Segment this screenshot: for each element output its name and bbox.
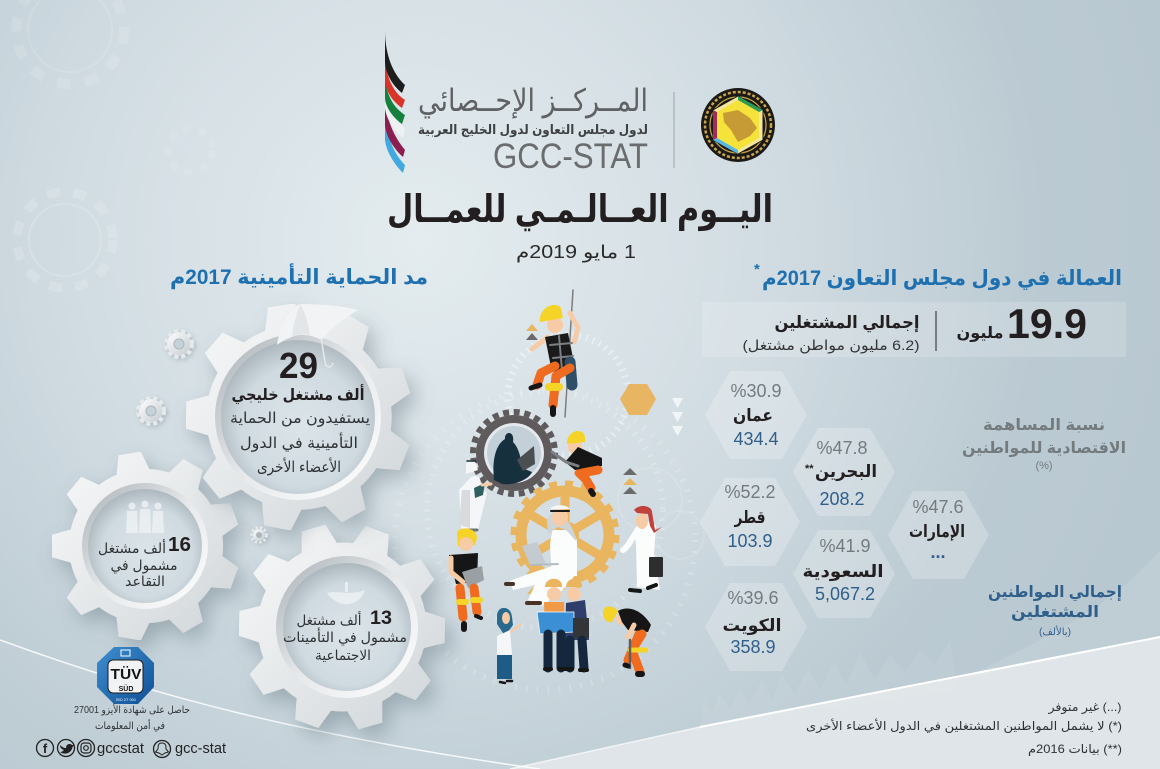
icon: umbrella [277, 304, 358, 367]
logo: Arabic subtitle: لدول مجلس التعاون لدول الخليج العربية [418, 122, 648, 137]
hexagon: Oman: 434.4 [733, 429, 779, 449]
logo: GCC-STAT wordmark: GCC-STAT [493, 137, 648, 176]
hexagon: Bahrain [793, 428, 895, 516]
figure: man in red shemagh with briefcase [623, 506, 663, 591]
hexagon: Oman: %30.9 [730, 381, 782, 401]
gear: GCC insured 29 thousand: الأعضاء الأخرى [257, 457, 341, 476]
gear: GCC insured 29 thousand: التأمينية في الدول [240, 432, 358, 453]
icon: gold hexagon [620, 384, 656, 415]
legend: citizens economic contribution [962, 417, 1126, 472]
gear: social insurance 13 thousand [239, 524, 445, 730]
hexagon: Qatar: %52.2 [724, 482, 776, 502]
legend: citizens economic contribution: الاقتصادية للمواطنين [962, 440, 1126, 457]
certification note [74, 703, 190, 732]
footnotes: (*) لا يشمل المواطنين المشتغلين في الدول الأعضاء الأخرى [806, 718, 1122, 734]
hexagon: Bahrain: %47.8 [816, 438, 868, 458]
icon: three people [126, 500, 164, 533]
hexagon: UAE: %47.6 [912, 497, 964, 517]
figure: engineers with blueprint [537, 579, 589, 670]
figure: worker carrying bricks [449, 528, 484, 629]
gear: social insurance 13 thousand: 13 [370, 608, 392, 629]
hexagon: Bahrain: 208.2 [819, 489, 865, 509]
icon: small gear lower [252, 528, 266, 542]
panel: total employed [702, 300, 1126, 357]
legend: total employed citizens [988, 584, 1122, 638]
gear: retirement 16 thousand: ألف مشتغل [98, 539, 166, 556]
icon: facebook [36, 740, 54, 756]
logo: Arabic name: المــركــز الإحــصائي [418, 83, 648, 119]
icon: small gear middle [138, 398, 164, 424]
icon: TUV certification badge [97, 647, 154, 704]
icon: facebook: f [43, 741, 48, 756]
heading: employment in GCC: * [754, 261, 760, 278]
hexagon: UAE [888, 491, 989, 579]
date: 1 مايو 2019م [516, 242, 636, 263]
social media row [36, 740, 227, 758]
citizens employed note: (6.2 مليون مواطن مشتغل) [742, 337, 920, 354]
gear: retirement 16 thousand: التقاعد [125, 573, 165, 589]
hexagon: Kuwait: الكويت [722, 616, 782, 636]
hexagon: Qatar: قطر [734, 508, 766, 528]
footnotes: (**) بيانات 2016م [1028, 742, 1122, 756]
total employed label: إجمالي المشتغلين [774, 313, 920, 333]
figure: worker with wrench [552, 431, 602, 494]
gear: social insurance 13 thousand: الاجتماعية [315, 647, 371, 663]
icon: dark gear [473, 412, 555, 494]
legend: citizens economic contribution: نسبة المساهمة [983, 417, 1105, 434]
heading: employment in GCC: العمالة في دول مجلس التعاون 2017م [762, 267, 1122, 290]
figure: man in white thobe with tablet [459, 460, 491, 532]
hexagon: Kuwait: %39.6 [727, 588, 779, 608]
hexagon: UAE: الإمارات [909, 522, 965, 541]
icon: mixed triangles left [527, 568, 539, 594]
legend: total employed citizens: المشتغلين [1011, 604, 1099, 621]
icon: mixed triangles right [623, 468, 637, 494]
gear: retirement 16 thousand: مشمول في [110, 557, 178, 574]
hexagon: Saudi Arabia: السعودية [802, 562, 884, 582]
heading: insurance coverage: مد الحماية التأمينية 2017م [170, 262, 428, 289]
title: اليــوم العــالـمـي للعمــال [387, 189, 773, 232]
icon: hand [327, 582, 365, 604]
figure: climbing worker [531, 290, 578, 417]
footnotes [806, 700, 1122, 756]
hexagon: Qatar: 103.9 [727, 531, 773, 551]
figure: worker with jackhammer [603, 606, 651, 674]
gear: GCC insured 29 thousand: ألف مشتغل خليجي [232, 384, 364, 405]
hexagon: Oman [705, 371, 807, 459]
certification note: في أمن المعلومات [95, 719, 165, 732]
hexagon: Oman: عمان [733, 406, 773, 425]
gear: social insurance 13 thousand: مشمول في التأمينات [283, 627, 407, 646]
icon: small triangles by climber [526, 324, 538, 340]
big number: 19.9 [1007, 300, 1087, 347]
gear: GCC insured 29 thousand [186, 304, 412, 530]
figure: seated man with laptop [506, 505, 577, 606]
hexagon: Kuwait [705, 583, 807, 671]
icon: gold gear [514, 484, 616, 586]
icon: TUV certification badge: TÜV [110, 666, 142, 683]
hexagon: UAE: ... [930, 542, 946, 562]
handle: gccstat: gccstat [97, 740, 145, 757]
hexagon: Bahrain: البحرين [815, 462, 877, 482]
icon: white triangles [672, 398, 683, 436]
icon: TUV certification badge: SÜD [119, 684, 133, 693]
legend: citizens economic contribution: (%) [1035, 460, 1053, 472]
million label: مليون [956, 325, 1004, 342]
gear: GCC insured 29 thousand: يستفيدون من الحماية [230, 410, 370, 427]
gear: social insurance 13 thousand: ألف مشتغل [296, 611, 362, 628]
gear: GCC insured 29 thousand: 29 [279, 345, 318, 386]
logo: GCC-STAT ribbon [385, 30, 405, 173]
gear: retirement 16 thousand [52, 452, 240, 640]
hexagon: Saudi Arabia: 5,067.2 [815, 584, 875, 604]
hexagon: Kuwait: 358.9 [730, 637, 776, 657]
hexagon: Bahrain: ** [805, 463, 814, 475]
icon: instagram [78, 740, 94, 756]
handle: gcc-stat: gcc-stat [175, 740, 227, 757]
footnotes: (...) غير متوفر [1047, 700, 1122, 715]
icon: TUV certification badge: ISO 27 001 [116, 697, 137, 702]
legend: total employed citizens: (بالألف) [1039, 625, 1071, 638]
icon: small gear upper [166, 331, 192, 357]
gear: retirement 16 thousand: 16 [168, 534, 191, 556]
hexagon: Saudi Arabia [793, 530, 895, 618]
icon: twitter [58, 740, 74, 756]
icon: snapchat [154, 740, 170, 758]
legend: total employed citizens: إجمالي المواطنين [988, 584, 1122, 602]
hexagon: Saudi Arabia: %41.9 [819, 536, 871, 556]
figure: woman in hijab [497, 608, 520, 683]
icon: GCC emblem [674, 88, 775, 168]
certification note: حاصل على شهادة الأيزو 27001 [74, 703, 190, 716]
hexagon: Qatar [700, 478, 800, 566]
